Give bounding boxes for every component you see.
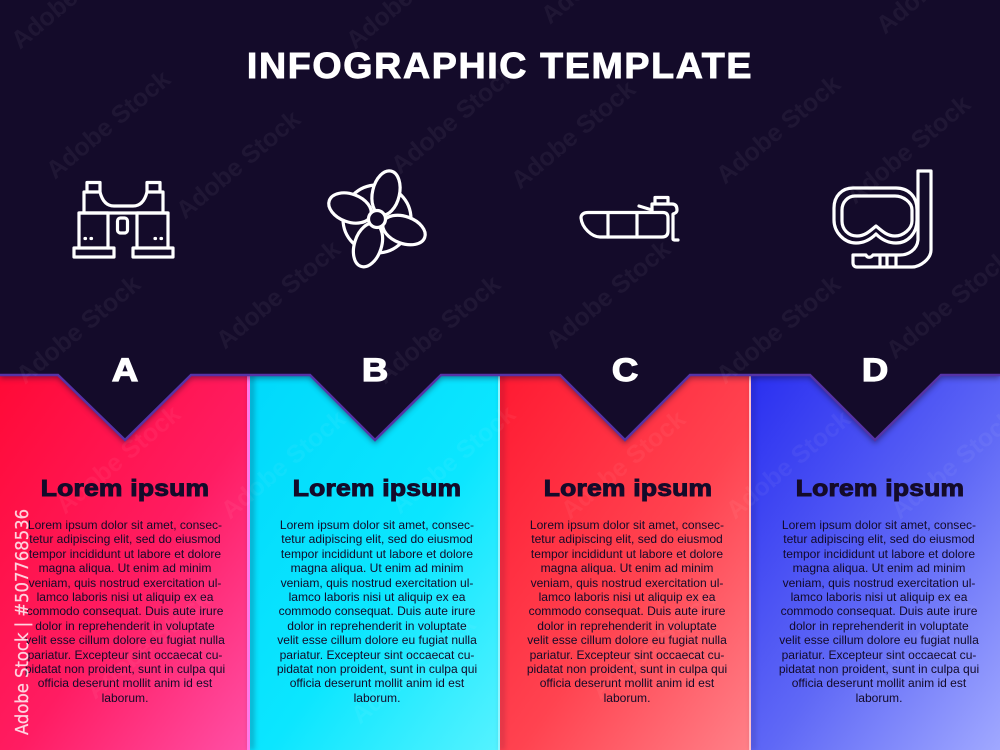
watermark: Adobe Stock bbox=[556, 405, 691, 525]
text block: B bbox=[277, 518, 477, 705]
label: C: C bbox=[612, 352, 638, 388]
watermark: Adobe Stock bbox=[841, 90, 976, 210]
text block: D: commodo consequat. Duis aute irure bbox=[781, 604, 977, 618]
icon: diving mask and snorkel bbox=[832, 169, 933, 269]
text block: A: commodo consequat. Duis aute irure bbox=[27, 604, 223, 618]
text block: A: laborum. bbox=[102, 691, 148, 705]
text block: C bbox=[527, 518, 727, 705]
text block: D bbox=[779, 518, 979, 705]
text block: B: Lorem ipsum dolor sit amet, consec- bbox=[280, 518, 474, 532]
text block: B: commodo consequat. Duis aute irure bbox=[279, 604, 475, 618]
text block: A: dolor in reprehenderit in voluptate bbox=[35, 619, 215, 633]
text block: D: dolor in reprehenderit in voluptate bbox=[789, 619, 969, 633]
text block: A: pidatat non proident, sunt in culpa qui bbox=[25, 662, 225, 676]
text block: A: pariatur. Excepteur sint occaecat cu- bbox=[28, 648, 222, 662]
text block: C: officia deserunt mollit anim id est bbox=[540, 676, 714, 690]
text block: B: magna aliqua. Ut enim ad minim bbox=[291, 561, 463, 575]
text block: B: lamco laboris nisi ut aliquip ex ea bbox=[289, 590, 465, 604]
watermark: Adobe Stock bbox=[386, 60, 521, 180]
text block: D: tempor incididunt ut labore et dolore bbox=[783, 547, 975, 561]
vertical stock id text: Adobe Stock | #507768536 bbox=[12, 509, 33, 735]
icon: propeller bbox=[327, 169, 427, 268]
panel: B bbox=[250, 375, 500, 750]
text block: B: tetur adipiscing elit, sed do eiusmod bbox=[281, 532, 473, 546]
watermark: Adobe Stock bbox=[171, 105, 306, 225]
watermark: Adobe Stock bbox=[51, 400, 186, 520]
text block: D: officia deserunt mollit anim id est bbox=[792, 676, 966, 690]
heading: D: Lorem ipsum bbox=[796, 475, 964, 501]
watermark: Adobe Stock bbox=[216, 405, 351, 525]
text block: A: veniam, quis nostrud exercitation ul- bbox=[29, 576, 221, 590]
label: A: A bbox=[112, 352, 138, 388]
text block: A: tempor incididunt ut labore et dolore bbox=[29, 547, 221, 561]
text block: D: veniam, quis nostrud exercitation ul- bbox=[783, 576, 975, 590]
text block: B: pidatat non proident, sunt in culpa qui bbox=[277, 662, 477, 676]
icon: inflatable motor boat bbox=[579, 196, 680, 242]
watermark: Adobe Stock bbox=[41, 65, 176, 185]
text block: A: officia deserunt mollit anim id est bbox=[38, 676, 212, 690]
watermark: Adobe Stock bbox=[211, 235, 346, 355]
label: D: D bbox=[862, 352, 888, 388]
text block: B: tempor incididunt ut labore et dolore bbox=[281, 547, 473, 561]
watermark: Adobe Stock bbox=[386, 400, 521, 520]
panel: A bbox=[0, 375, 248, 750]
icon: binoculars bbox=[72, 180, 175, 259]
text block: C: pariatur. Excepteur sint occaecat cu- bbox=[530, 648, 724, 662]
watermark: Adobe Stock bbox=[506, 75, 641, 195]
watermark: Adobe Stock bbox=[721, 405, 856, 525]
text block: D: pariatur. Excepteur sint occaecat cu- bbox=[782, 648, 976, 662]
watermark: Adobe Stock bbox=[586, 585, 721, 705]
panel edge highlight: A bbox=[247, 375, 250, 750]
text block: D: tetur adipiscing elit, sed do eiusmod bbox=[783, 532, 975, 546]
text block: A: velit esse cillum dolore eu fugiat nulla bbox=[25, 633, 225, 647]
text block: C: dolor in reprehenderit in voluptate bbox=[537, 619, 717, 633]
text block: C: laborum. bbox=[604, 691, 650, 705]
watermark: Adobe Stock bbox=[711, 270, 846, 390]
text block: B: dolor in reprehenderit in voluptate bbox=[287, 619, 467, 633]
text block: A: lamco laboris nisi ut aliquip ex ea bbox=[37, 590, 213, 604]
text block: C: tetur adipiscing elit, sed do eiusmod bbox=[531, 532, 723, 546]
text block: B: officia deserunt mollit anim id est bbox=[290, 676, 464, 690]
watermark: Adobe Stock bbox=[81, 585, 216, 705]
watermark: Adobe Stock bbox=[541, 235, 676, 355]
text block: B: pariatur. Excepteur sint occaecat cu- bbox=[280, 648, 474, 662]
text block: C: tempor incididunt ut labore et dolore bbox=[531, 547, 723, 561]
text block: A: magna aliqua. Ut enim ad minim bbox=[39, 561, 211, 575]
notched header band bbox=[0, 374, 1000, 446]
text block: D: Lorem ipsum dolor sit amet, consec- bbox=[782, 518, 976, 532]
text block: B: laborum. bbox=[354, 691, 400, 705]
heading: A: Lorem ipsum bbox=[41, 475, 209, 501]
text block: D: lamco laboris nisi ut aliquip ex ea bbox=[791, 590, 967, 604]
panel edge highlight: B bbox=[498, 375, 500, 750]
text block: B: veniam, quis nostrud exercitation ul- bbox=[281, 576, 473, 590]
text block: C: magna aliqua. Ut enim ad minim bbox=[541, 561, 713, 575]
text block: D: velit esse cillum dolore eu fugiat nulla bbox=[779, 633, 979, 647]
text block: C: Lorem ipsum dolor sit amet, consec- bbox=[530, 518, 724, 532]
watermark: Adobe Stock bbox=[346, 610, 481, 730]
label: B: B bbox=[362, 352, 388, 388]
text block: A bbox=[25, 518, 225, 705]
watermark: Adobe Stock bbox=[11, 270, 146, 390]
text block: C: commodo consequat. Duis aute irure bbox=[529, 604, 725, 618]
heading: C: Lorem ipsum bbox=[544, 475, 712, 501]
heading: B: Lorem ipsum bbox=[293, 475, 461, 501]
text block: B: velit esse cillum dolore eu fugiat nulla bbox=[277, 633, 477, 647]
text block: C: veniam, quis nostrud exercitation ul- bbox=[531, 576, 723, 590]
panel edge highlight: C bbox=[749, 375, 751, 750]
text block: A: Lorem ipsum dolor sit amet, consec- bbox=[28, 518, 222, 532]
text block: D: magna aliqua. Ut enim ad minim bbox=[793, 561, 965, 575]
text block: C: pidatat non proident, sunt in culpa qui bbox=[527, 662, 727, 676]
text block: A: tetur adipiscing elit, sed do eiusmod bbox=[29, 532, 221, 546]
text block: C: velit esse cillum dolore eu fugiat nulla bbox=[527, 633, 727, 647]
panel: C bbox=[500, 375, 750, 750]
panel: D bbox=[750, 375, 1000, 750]
title: INFOGRAPHIC TEMPLATE bbox=[247, 45, 753, 86]
watermark: Adobe Stock bbox=[371, 270, 506, 390]
watermark: Adobe Stock bbox=[846, 590, 981, 710]
text block: D: laborum. bbox=[856, 691, 902, 705]
text block: D: pidatat non proident, sunt in culpa qui bbox=[779, 662, 979, 676]
watermark: Adobe Stock bbox=[711, 70, 846, 190]
text block: C: lamco laboris nisi ut aliquip ex ea bbox=[539, 590, 715, 604]
